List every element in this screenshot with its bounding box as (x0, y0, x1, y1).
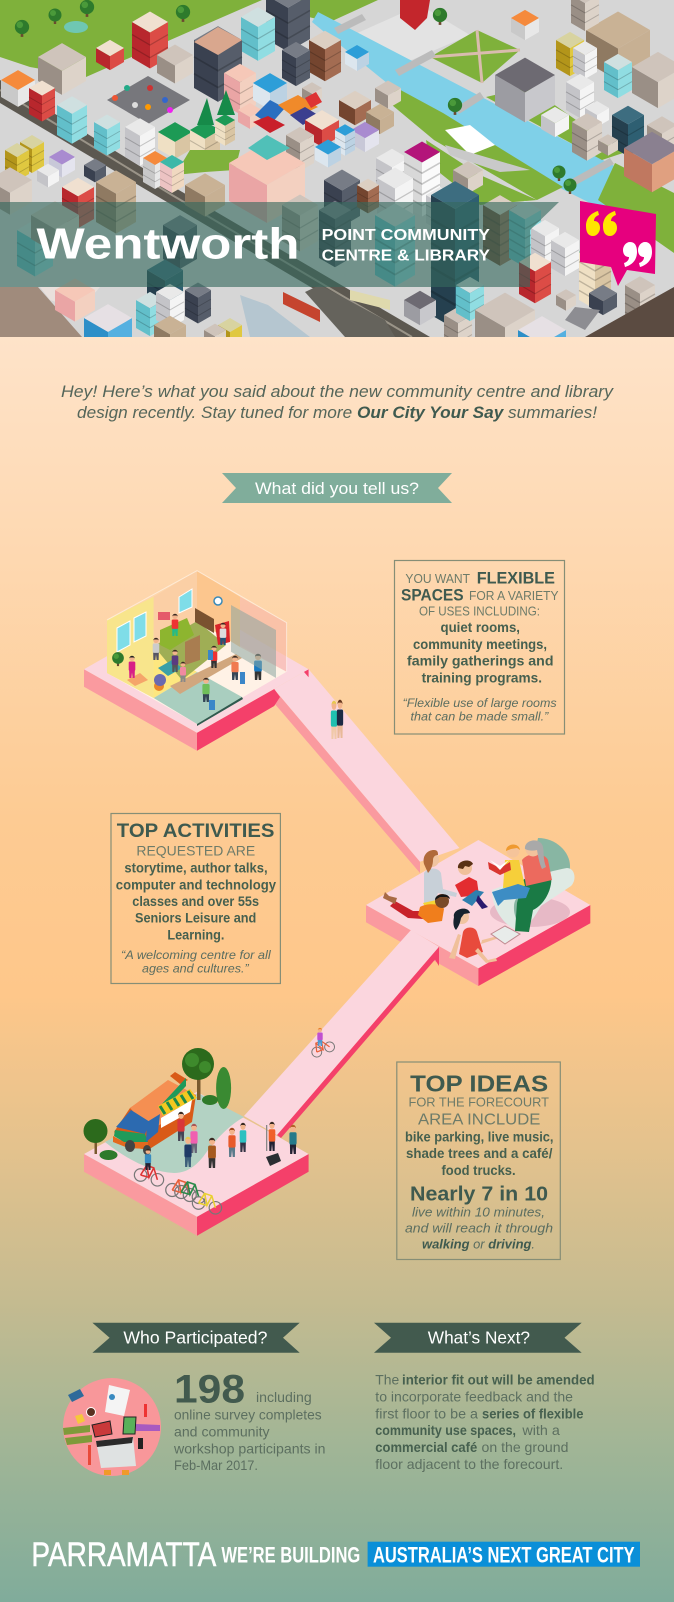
icon: small tree (84, 1119, 108, 1154)
platform: reading group (366, 840, 590, 986)
food truck customers and musicians (177, 1112, 297, 1168)
intro text (61, 382, 615, 422)
title band (0, 202, 559, 287)
text box: top ideas: shade trees and a café/ (406, 1146, 553, 1161)
text box: top activities: REQUESTED ARE (136, 843, 255, 859)
text box: flexible spaces: family gatherings and (407, 654, 554, 668)
city illustration (0, 0, 674, 368)
people walking on walkway (331, 700, 343, 739)
icon: workshop table circle (63, 1378, 161, 1476)
icon: bush (100, 1150, 118, 1160)
icon: cypress tree (216, 1067, 231, 1109)
banner: What's Next? (374, 1323, 582, 1353)
who participated text: including (256, 1389, 312, 1405)
subtitle (322, 227, 491, 265)
text box: flexible spaces (394, 560, 564, 734)
text box: top activities: TOP ACTIVITIES (117, 821, 274, 842)
what's next text: series of flexible (482, 1405, 584, 1421)
who participated text: Feb-Mar 2017. (174, 1457, 258, 1473)
who participated text (173, 1367, 326, 1473)
text box: top ideas: live within 10 minutes, (412, 1205, 545, 1220)
icon: speaker (266, 1153, 281, 1166)
what's next text: community use spaces, (375, 1422, 516, 1438)
banner: What did you tell us?: What did you tell us? (255, 479, 419, 498)
text box: top ideas: and will reach it through (405, 1220, 553, 1235)
icon: tall tree (182, 1048, 214, 1100)
reading group illustration (383, 838, 574, 963)
text box: top ideas: TOP IDEAS (410, 1071, 548, 1097)
text box: flexible spaces: quiet rooms, (440, 620, 520, 635)
text box: top ideas: Nearly 7 in 10 (410, 1184, 548, 1206)
subtitle: CENTRE & LIBRARY (322, 248, 491, 265)
footer: Parramatta tagline: PARRAMATTA (31, 1536, 217, 1574)
what's next text (375, 1371, 595, 1472)
text box: top ideas: AREA INCLUDE (418, 1111, 540, 1128)
plaza (105, 1093, 244, 1173)
text box: top activities: “A welcoming centre for all (121, 948, 271, 962)
text box: flexible spaces: that can be made small.” (410, 710, 549, 724)
what's next text: on the ground (482, 1439, 568, 1455)
title: Wentworth: Wentworth (36, 219, 300, 268)
text box: flexible spaces: OF USES INCLUDING: (419, 604, 540, 618)
what's next text: The (375, 1371, 400, 1387)
who participated text: and community (174, 1423, 270, 1439)
intro text: Hey! Here’s what you said about the new community centre and library (61, 382, 615, 401)
walkway: room to reading platform (274, 669, 459, 873)
food truck illustration (84, 1028, 337, 1214)
what's next text: first floor to be a (375, 1405, 478, 1421)
banner: Who Participated? (92, 1323, 300, 1353)
what's next text: with a (521, 1422, 560, 1438)
text box: flexible spaces: training programs. (422, 670, 542, 686)
food truck (113, 1072, 197, 1155)
banner: What's Next?: What’s Next? (428, 1328, 530, 1348)
text box: top activities: Learning. (167, 928, 224, 942)
text box: flexible spaces: FLEXIBLE (477, 570, 555, 588)
who participated text: 198 (174, 1367, 245, 1411)
what's next text: floor adjacent to the forecourt. (375, 1456, 563, 1472)
text box: top activities: classes and over 55s (132, 894, 259, 909)
walkway: reading platform to forecourt (244, 930, 439, 1138)
intro text: design recently. Stay tuned for more Our City Your Say summaries! (77, 403, 597, 422)
text box: flexible spaces: “Flexible use of large rooms (403, 696, 557, 710)
who participated text: online survey completes (174, 1406, 322, 1422)
icon: bush rear (202, 1095, 218, 1105)
text box: top activities (111, 814, 280, 984)
text box: top ideas: FOR THE FORECOURT (408, 1095, 549, 1110)
banner: What did you tell us? (222, 473, 452, 503)
header (0, 0, 674, 368)
text box: flexible spaces: FOR A VARIETY (469, 589, 559, 603)
icon: quote speech bubble (580, 201, 656, 286)
bicycles (134, 1149, 222, 1214)
text box: top activities: ages and cultures.” (142, 961, 250, 975)
who participated text: workshop participants in (173, 1440, 326, 1456)
footer: Parramatta tagline: WE’RE BUILDING (221, 1542, 360, 1567)
text box: top activities: Seniors Leisure and (135, 911, 256, 926)
text box: top ideas (397, 1062, 560, 1260)
text box: top activities: storytime, author talks, (124, 860, 268, 876)
text box: flexible spaces: YOU WANT (405, 572, 470, 586)
what's next text: interior fit out will be amended (402, 1371, 595, 1387)
what's next text: to incorporate feedback and the (375, 1388, 573, 1404)
platform: flexible room (84, 571, 309, 751)
platform: forecourt (84, 1092, 309, 1236)
cyclist on walkway (308, 1028, 337, 1062)
text box: flexible spaces: community meetings, (413, 637, 547, 652)
text box: flexible spaces: SPACES (401, 586, 464, 604)
room illustration (107, 571, 287, 726)
footer: Parramatta tagline (31, 1536, 640, 1574)
what's next text: commercial café (375, 1439, 477, 1455)
text box: top ideas: food trucks. (442, 1163, 516, 1178)
subtitle: POINT COMMUNITY (322, 227, 491, 244)
banner: Who Participated?: Who Participated? (123, 1328, 268, 1348)
text box: top ideas: walking or driving. (422, 1236, 535, 1251)
text box: top ideas: bike parking, live music, (405, 1129, 554, 1144)
text box: top activities: computer and technology (116, 877, 276, 892)
